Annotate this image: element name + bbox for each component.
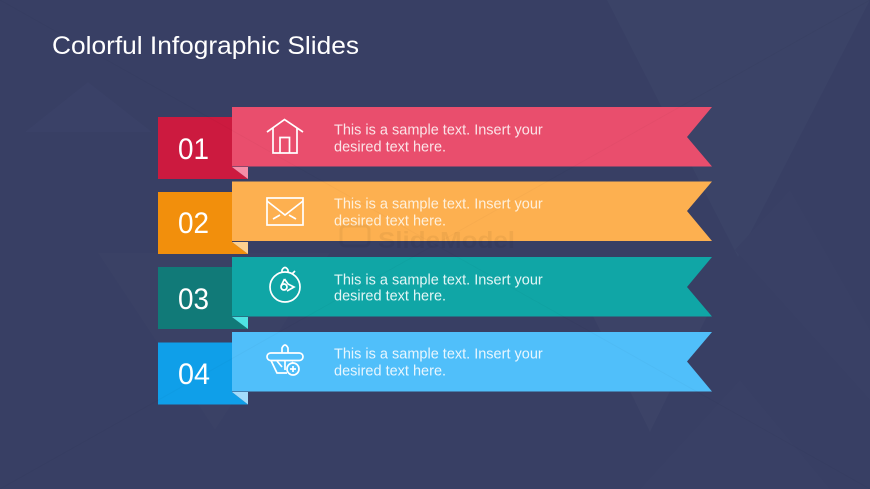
icon: stopwatch <box>270 268 300 302</box>
number box 01 <box>158 117 248 179</box>
watermark <box>341 226 515 253</box>
text block 2: This is a sample text. Insert your <box>334 196 543 212</box>
icon: basket with plus <box>267 345 303 375</box>
icon: envelope <box>267 198 303 225</box>
text block 3: desired text here. <box>334 288 446 304</box>
number box 01: 01 <box>178 133 209 166</box>
text block 1: desired text here. <box>334 140 446 156</box>
row 3: teal ribbon <box>158 257 712 329</box>
title: Colorful Infographic Slides <box>52 32 359 60</box>
text block 4: desired text here. <box>334 364 446 380</box>
row 4: blue ribbon <box>158 332 712 404</box>
number box 03: 03 <box>178 283 209 316</box>
ribbon banner 1 <box>232 107 712 166</box>
icon: house <box>267 120 303 153</box>
row 2: orange ribbon <box>158 182 712 254</box>
number box 03 <box>158 267 248 329</box>
number box 02 <box>158 192 248 254</box>
ribbon banner 3 <box>232 257 712 316</box>
number box 04: 04 <box>178 358 210 391</box>
ribbon banner 4 <box>232 332 712 392</box>
text block 2: desired text here. <box>334 214 446 230</box>
text block 1: This is a sample text. Insert your <box>334 122 543 138</box>
number box 04 <box>158 342 248 404</box>
row 1: red ribbon <box>158 107 712 179</box>
text block 4: This is a sample text. Insert your <box>334 346 543 362</box>
number box 02: 02 <box>178 207 209 240</box>
ribbon banner 2 <box>232 182 712 241</box>
text block 3: This is a sample text. Insert your <box>334 272 543 288</box>
watermark: SlideModel <box>378 227 515 253</box>
